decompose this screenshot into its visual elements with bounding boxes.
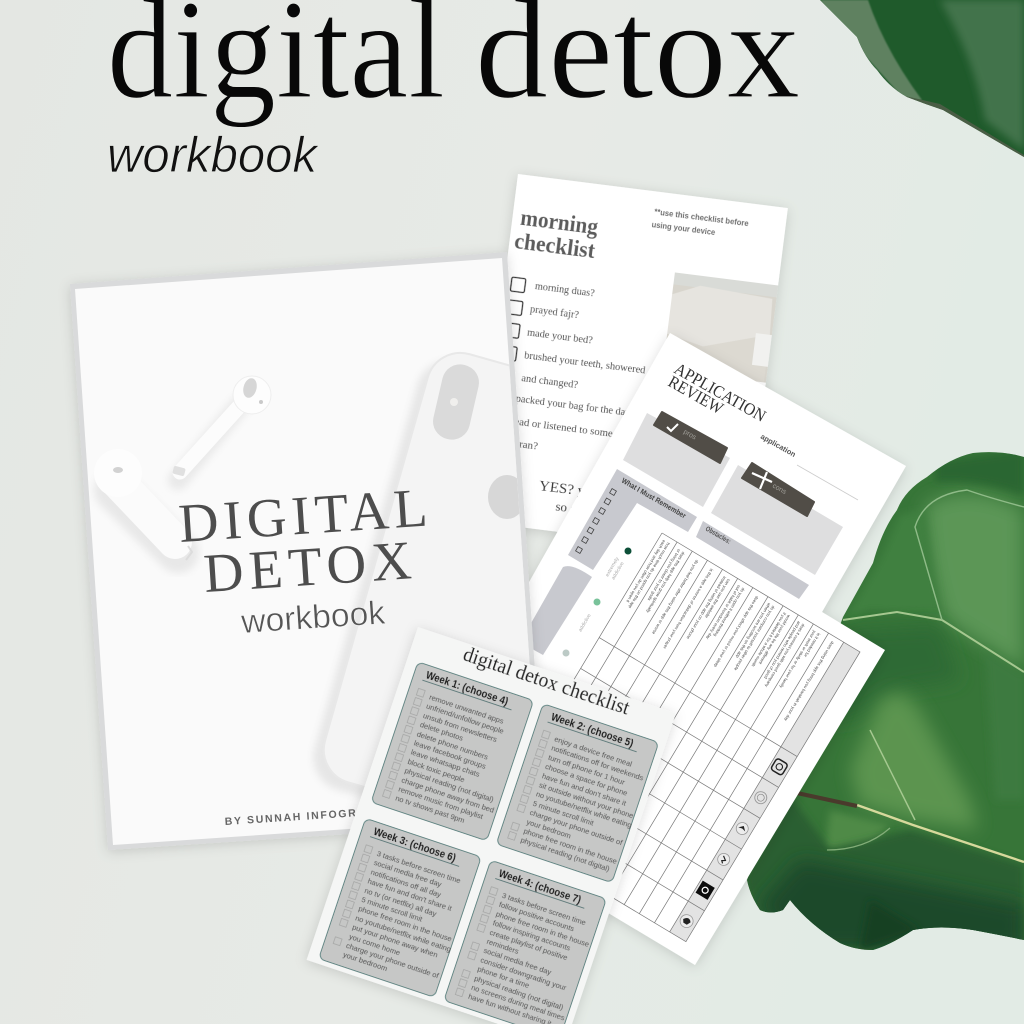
title (107, 0, 800, 128)
panel: week 4 (444, 860, 606, 1024)
checklist items: morning duas? (534, 280, 595, 300)
table header questions: can you use the website (704, 578, 731, 620)
sheet: application review and table (464, 333, 906, 965)
table header questions: is it needed for (803, 632, 821, 659)
panel: week 4: reminders (485, 937, 520, 956)
panel: week 4: consider downgrading your (479, 955, 568, 992)
panel: week 1: leave whatsapp chats (410, 748, 481, 779)
cons box (711, 463, 843, 575)
checklist items (507, 279, 658, 465)
panel: week 2: your bedroom (526, 817, 572, 840)
table header questions: your work or study or for your family (778, 629, 817, 690)
checklist items: packed your bag for the day? (515, 393, 636, 420)
table header questions: do you feel better after using this app or worse (651, 559, 700, 636)
table header questions: how much time do you spend on this app (627, 542, 671, 610)
checklist items: read or listened to some of the (510, 415, 641, 443)
panel: week 2 (496, 704, 659, 883)
addiction legend: addictive (611, 561, 626, 581)
table header questions: when you are scrolling on this app (734, 602, 772, 660)
leaf: large fiddle leaf (740, 440, 1024, 970)
checklist items: quran? (507, 437, 539, 453)
panel: week 4: 3 tasks before screen time (501, 891, 587, 927)
closing message (536, 478, 649, 525)
panel: week 2: charge your phone outside of (529, 808, 624, 848)
pros box (623, 412, 730, 507)
cover byline: BY SUNNAH INFOGRAPHICS (224, 804, 406, 828)
panel: week 2: phone free room in the house (522, 826, 618, 866)
panel: week 1: Week 1: (choose 4) (424, 669, 510, 708)
obstacles bar (696, 521, 809, 599)
table header questions: is this app a source of distraction from your prayer (662, 568, 714, 650)
panel: week 1: delete photos (419, 720, 465, 743)
rounded grey note box (525, 566, 592, 655)
panel: week 3: put your phone away when (351, 923, 439, 960)
obstacles bar: Obstacles: (704, 526, 732, 546)
panel: week 1: charge phone away from bed (400, 775, 495, 815)
panel: week 1: remove music from playlist (397, 784, 485, 821)
panel: week 3: no youtube/netflix while eating (354, 913, 452, 954)
bedroom photo (663, 272, 778, 383)
panel: week 1 (371, 662, 534, 841)
panel: week 4: physical reading (not digital) (473, 974, 565, 1012)
checklist items: brushed your teeth, showered (524, 349, 647, 377)
checkboxes (502, 277, 526, 361)
panel: week 2: physical reading (not digital) (519, 836, 611, 874)
panel: week 1: no tv shows past 9pm (394, 794, 466, 825)
panel: week 1: leave facebook groups (413, 738, 487, 771)
table header questions (614, 539, 835, 723)
application label (759, 432, 858, 500)
sheet: morning checklist (474, 174, 788, 555)
panel: week 4: follow positive accounts (498, 900, 576, 934)
closing message: YES? you can use (538, 478, 649, 508)
addiction legend: addictive (578, 613, 593, 633)
social media icons (677, 758, 789, 930)
panel: workbook cover (67, 251, 539, 855)
panel: week 4: Week 4: (choose 7) (497, 868, 583, 907)
morning checklist heading: checklist (513, 228, 597, 263)
table header questions: each day and how often do you open it (625, 539, 667, 604)
panel: week 3: 3 tasks before screen time (376, 849, 462, 885)
panel: week 2: sit outside without your phone (538, 780, 635, 820)
what i must remember: What I Must Remember (620, 476, 688, 520)
panel: week 2: choose a space for phone (544, 762, 629, 798)
cover title: DETOX (202, 529, 413, 604)
pros box: pros (682, 429, 698, 442)
table header questions: instead of using the app on your phone (685, 575, 727, 641)
panel: week 3 (319, 818, 482, 997)
review table (471, 523, 860, 942)
table header questions: or bring you closer to your goals (647, 548, 682, 602)
panel: week 1: physical reading (not digital) (403, 766, 495, 804)
cover title: DIGITAL (177, 477, 429, 554)
panel: week 4: phone free room in the house (495, 909, 590, 949)
panel: week 3: phone free room in the house (357, 904, 453, 944)
morning checklist heading: morning (519, 205, 600, 239)
sheet: digital detox checklist (307, 625, 677, 1024)
table header questions: does this app affect your mood or your sleep (713, 595, 760, 669)
panel: week 4: social media free day (482, 946, 553, 977)
panel: week 3: notifications off all day (370, 867, 442, 899)
panel: week 3: no tv (or netflix) all day (363, 886, 438, 918)
leaf: top right (820, 0, 1024, 157)
panel: week 2: no youtube/netflix while eating (535, 790, 633, 830)
checklist title: digital detox checklist (460, 642, 633, 720)
what i must remember (568, 469, 697, 570)
subtitle: workbook (107, 127, 320, 183)
panel: week 4: create playlist of positive (489, 928, 569, 962)
panel: week 1: remove unwanted apps (428, 692, 505, 726)
checklist items: made your bed? (526, 326, 594, 347)
panel: week 3: you come home (348, 932, 401, 957)
morning checklist heading (513, 204, 600, 263)
table header questions: does it connect you with good company (763, 623, 806, 689)
cover subtitle: workbook (239, 593, 387, 640)
panel: week 3: social media free day (373, 858, 443, 889)
table header questions: if you deleted it for a whole month (750, 611, 787, 668)
table header questions: out of habit or boredom every day (705, 584, 742, 641)
device note: using your device (651, 220, 716, 237)
panel: week 3: have fun and don't share it (366, 877, 454, 913)
panel: week 4: no screens during meal times (470, 983, 566, 1023)
device note (651, 207, 750, 241)
cons box: cons (771, 483, 788, 496)
cover title (177, 477, 429, 604)
panel: week 1: unsub from newsletters (422, 711, 498, 744)
table header questions: do you open it without thinking (712, 587, 746, 638)
panel: week 3: Week 3: (choose 6) (372, 826, 458, 865)
panel: week 2: enjoy a device free meal (553, 734, 633, 769)
table header questions: does using this app bring you barakah in your day (783, 640, 835, 723)
closing message: so go ahead (555, 498, 618, 521)
panel: week 1: block toxic people (406, 757, 466, 784)
table header questions: do you compare yourself to other people (733, 605, 776, 672)
application review heading: REVIEW (665, 372, 727, 418)
panel: week 2: have fun and don't share it (541, 771, 628, 808)
panel: week 3: your bedroom (342, 950, 389, 973)
device note: **use this checklist before (654, 207, 750, 228)
application review heading: APPLICATION (671, 359, 769, 426)
panel: week 2: notifications off for weekends (550, 744, 645, 783)
addiction legend: extremely (605, 556, 621, 578)
table header questions: would your life be any different (757, 614, 791, 666)
panel: week 4: phone for a time (476, 964, 530, 990)
panel: week 4: follow inspiring accounts (492, 918, 572, 953)
panel: week 3: 5 minute scroll limit (360, 895, 424, 924)
panel: week 2: turn off phone for 1 hour (547, 753, 627, 787)
checklist items: and changed? (521, 372, 579, 391)
table header questions: does this app help you grow spiritually (645, 551, 686, 615)
addiction legend (562, 548, 632, 656)
earbud: lower (94, 449, 192, 560)
panel: week 3: charge your phone outside of (345, 941, 441, 981)
cover photo: phone and earbuds (94, 343, 653, 844)
checklist items: prayed fajr? (529, 303, 580, 321)
panel: week 2: 5 minute scroll limit (532, 799, 596, 828)
table header questions: and people who remind you of good (763, 620, 802, 680)
earbud: upper (172, 376, 271, 480)
panel: week 1: unfriend/unfollow people (425, 702, 505, 736)
application label: application (759, 432, 798, 459)
panel: week 2: Week 2: (choose 5) (549, 711, 635, 750)
panel: week 1: delete phone numbers (416, 729, 490, 762)
